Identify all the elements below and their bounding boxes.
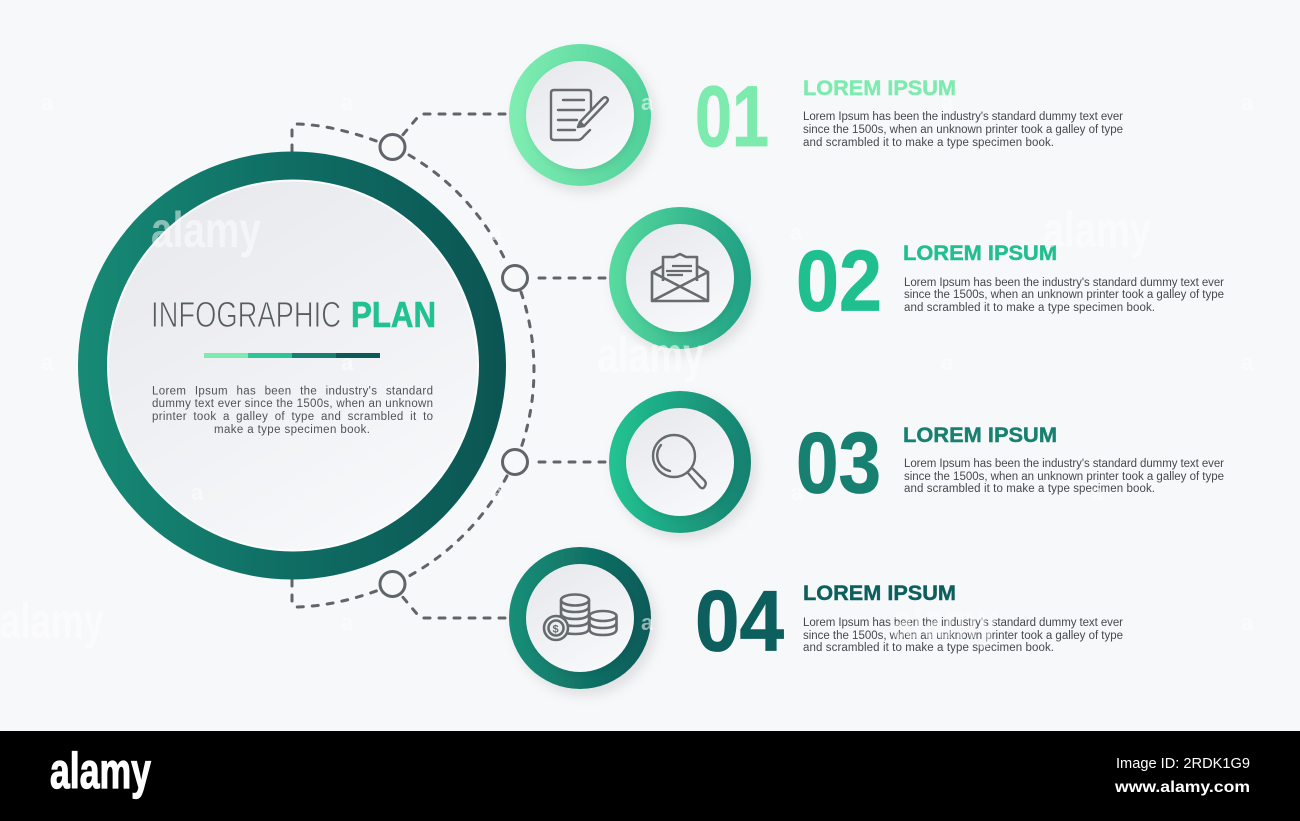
text block 4 [803,582,1123,654]
text block 2: and scrambled it to make a type specimen book. [904,302,1155,314]
text block 2: LOREM IPSUM [903,242,1057,265]
text block 2: Lorem Ipsum has been the industry's standard dummy text ever [904,277,1224,289]
text block 4: and scrambled it to make a type specimen book. [803,642,1054,654]
text block 1 [803,77,1123,149]
icon: magnifier [653,435,706,488]
watermarks: a [641,90,654,115]
watermarks: a [1241,350,1254,375]
footer logo: alamy [50,743,151,799]
watermarks: a [341,350,354,375]
footer bar [0,731,1300,821]
text block 4: Lorem Ipsum has been the industry's standard dummy text ever [803,617,1123,629]
watermarks: a [791,480,804,505]
watermarks: a [41,350,54,375]
connector nodes [380,134,528,596]
panel: central circle [78,152,506,580]
step 2 circle [609,207,751,349]
icon: open envelope [652,254,708,301]
divider bar [204,353,380,358]
icon: coin stacks: $ [552,624,559,636]
text block 1: Lorem Ipsum has been the industry's standard dummy text ever [803,111,1123,123]
central text block [152,386,433,436]
watermarks: alamy [151,202,261,258]
text block 4: since the 1500s, when an unknown printer took a galley of type [803,630,1123,642]
text block 1: since the 1500s, when an unknown printer took a galley of type [803,124,1123,136]
watermarks: a [1241,90,1254,115]
central text block: Lorem Ipsum has been the industry's standard [152,386,433,398]
central text block: dummy text ever since the 1500s, when an unknown [152,398,433,410]
number 01: 01 [695,69,769,165]
watermarks: a [341,90,354,115]
watermarks: alamy [597,327,704,383]
watermarks: alamy [1043,202,1151,258]
watermarks: a [341,610,354,635]
heading: infographic plan: INFOGRAPHIC [151,294,341,335]
text block 3: Lorem Ipsum has been the industry's standard dummy text ever [904,458,1224,470]
icon: document and pen [551,90,608,140]
heading: infographic plan: PLAN [351,294,436,335]
icon: coin stacks [544,594,616,640]
watermarks: alamy [0,593,104,649]
watermarks: a [1091,480,1104,505]
central text block: make a type specimen book. [214,424,370,436]
text block 2: since the 1500s, when an unknown printer took a galley of type [904,289,1224,301]
central text block: printer took a galley of type and scrambled it to [152,411,433,423]
footer image id: Image ID: 2RDK1G9 [1116,756,1250,772]
watermarks [0,90,1254,649]
dashed connector network [292,114,605,618]
text block 1: and scrambled it to make a type specimen book. [803,137,1054,149]
footer url: www.alamy.com [1114,779,1250,796]
number 03: 03 [796,416,881,512]
step 3 circle [609,391,751,533]
step 4 circle [509,547,651,689]
text block 2 [903,242,1224,314]
watermarks: alamy [892,593,998,649]
text block 1: LOREM IPSUM [803,77,956,100]
text block 3 [903,424,1224,495]
watermarks: a [41,90,54,115]
watermarks: a [941,350,954,375]
watermarks: a [191,480,204,505]
text block 4: LOREM IPSUM [803,582,956,605]
watermarks: a [491,480,504,505]
text block 3: since the 1500s, when an unknown printer took a galley of type [904,471,1224,483]
watermarks: a [941,90,954,115]
number 04: 04 [695,574,784,670]
text block 3: and scrambled it to make a type specimen book. [904,483,1155,495]
watermarks: a [641,610,654,635]
watermarks: a [490,220,503,245]
step 1 circle [509,44,651,186]
number 02: 02 [796,234,882,330]
watermarks: a [790,220,803,245]
watermarks: a [1241,610,1254,635]
text block 3: LOREM IPSUM [903,424,1057,447]
